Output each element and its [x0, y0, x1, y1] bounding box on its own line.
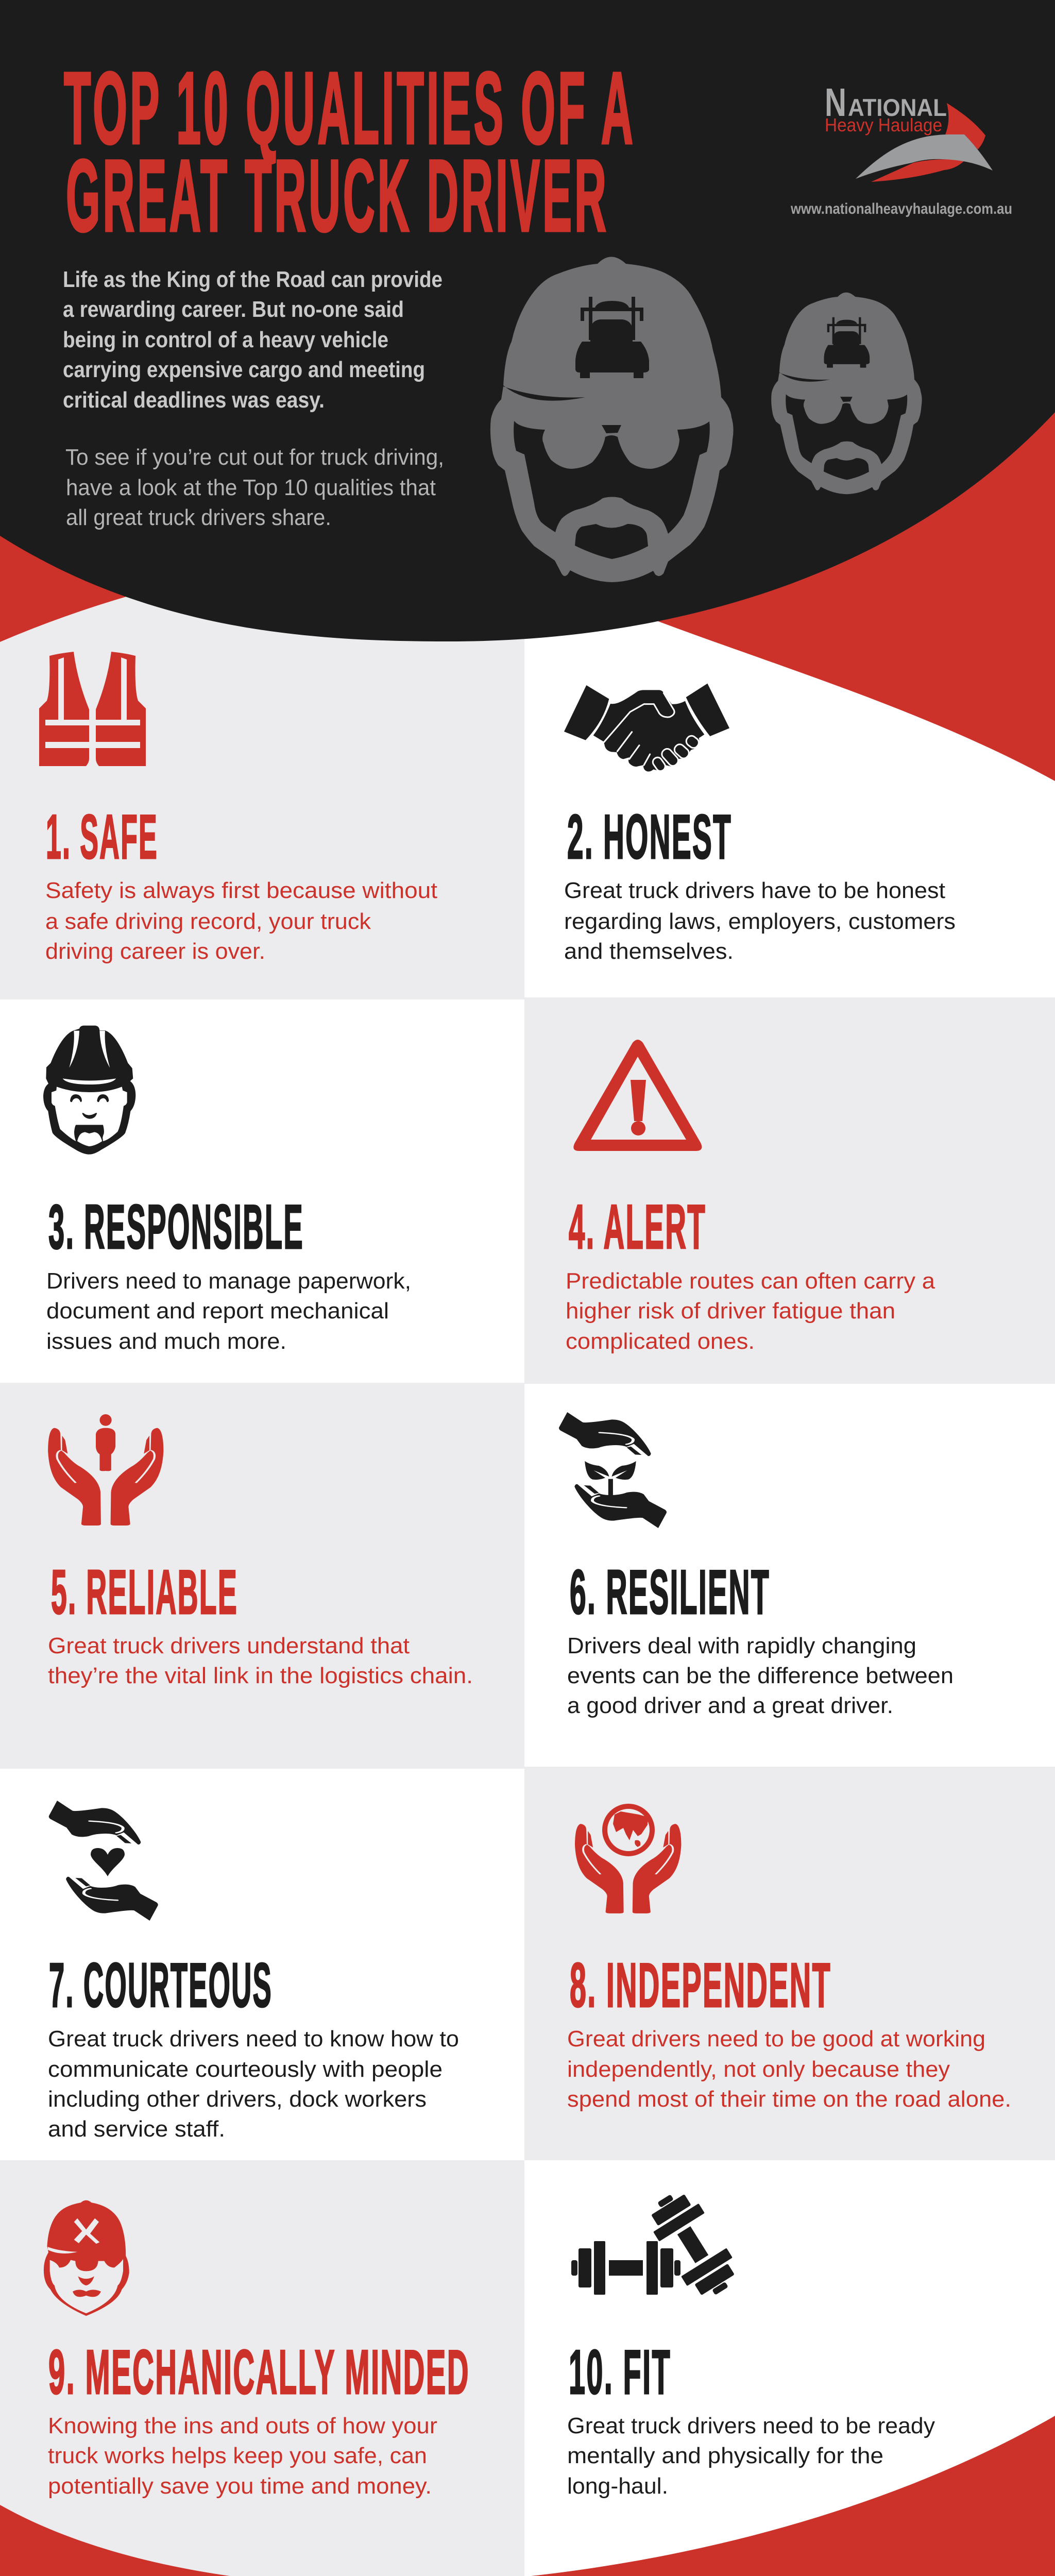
- text: mechanically minded description: potentially save you time and money.: [48, 2473, 432, 2499]
- panel: 8 independent: [524, 1767, 1055, 2160]
- text: safe description: Safety is always first because without: [45, 878, 437, 903]
- icon: warning triangle: [573, 1040, 702, 1151]
- panel: 3 responsible: 3. RESPONSIBLE: [48, 1192, 304, 1262]
- icon: hard hat face: [43, 1026, 135, 1155]
- intro bold text: [63, 267, 443, 413]
- panel: 2 honest: 2. HONEST: [567, 802, 732, 872]
- text: mechanically minded description: [48, 2413, 437, 2499]
- text: honest description: regarding laws, employers, customers: [564, 909, 956, 934]
- text: responsible description: [46, 1268, 411, 1354]
- text: courteous description: Great truck drivers need to know how to: [48, 2026, 459, 2052]
- panel: 5 reliable: [0, 1383, 524, 1769]
- icon: hands with plant: [559, 1412, 667, 1528]
- icon: mechanic face: [44, 2200, 129, 2316]
- intro bold text: critical deadlines was easy.: [63, 387, 325, 413]
- text: courteous description: including other drivers, dock workers: [48, 2087, 427, 2112]
- text: fit description: [567, 2413, 935, 2499]
- text: alert description: [566, 1268, 935, 1354]
- text: responsible description: Drivers need to manage paperwork,: [46, 1268, 411, 1294]
- panel: 6 resilient: [524, 1384, 1055, 1767]
- text: honest description: [564, 878, 956, 964]
- panel: 6 resilient: 6. RESILIENT: [570, 1557, 770, 1627]
- icon: hands holding globe: [575, 1806, 681, 1913]
- intro regular text: have a look at the Top 10 qualities that: [66, 475, 436, 500]
- text: resilient description: a good driver and a great driver.: [567, 1693, 893, 1718]
- icon: handshake: [564, 684, 729, 773]
- bottom red wave: [0, 2416, 1055, 2576]
- intro bold text: Life as the King of the Road can provide: [63, 267, 443, 292]
- intro bold text: carrying expensive cargo and meeting: [63, 357, 425, 382]
- text: alert description: complicated ones.: [566, 1329, 755, 1354]
- text: fit description: mentally and physically for the: [567, 2443, 883, 2468]
- panel: 9 mechanically minded: 9. MECHANICALLY MINDED: [48, 2337, 470, 2407]
- text: safe description: driving career is over.: [45, 939, 265, 964]
- title: [64, 51, 636, 252]
- text: reliable description: [48, 1633, 473, 1688]
- text: mechanically minded description: truck works helps keep you safe, can: [48, 2443, 427, 2468]
- text: alert description: higher risk of driver fatigue than: [566, 1298, 895, 1324]
- text: independent description: Great drivers need to be good at working: [567, 2026, 985, 2052]
- intro bold text: being in control of a heavy vehicle: [63, 327, 388, 352]
- website url: www.nationalheavyhaulage.com.au: [790, 200, 1012, 217]
- text: alert description: Predictable routes can often carry a: [566, 1268, 935, 1294]
- text: responsible description: issues and much more.: [46, 1329, 286, 1354]
- panel: 7 courteous: 7. COURTEOUS: [49, 1950, 273, 2020]
- icon: hands with heart: [49, 1801, 158, 1921]
- panel: 4 alert: [524, 997, 1055, 1384]
- panel: 2 honest: [524, 613, 1055, 997]
- text: courteous description: and service staff.: [48, 2116, 225, 2142]
- text: responsible description: document and report mechanical: [46, 1298, 389, 1324]
- text: independent description: independently, not only because they: [567, 2057, 950, 2082]
- text: fit description: Great truck drivers need to be ready: [567, 2413, 935, 2438]
- panel: 9 mechanically minded: [0, 2160, 524, 2576]
- text: fit description: long-haul.: [567, 2473, 668, 2499]
- icon: dumbbells: [571, 2184, 744, 2305]
- text: honest description: and themselves.: [564, 939, 734, 964]
- text: courteous description: [48, 2026, 459, 2142]
- intro regular text: all great truck drivers share.: [66, 505, 331, 530]
- header red accent left: [0, 531, 144, 642]
- icon: hands holding person: [48, 1414, 163, 1526]
- icon: safety vest: [39, 652, 146, 766]
- text: independent description: [567, 2026, 1011, 2112]
- text: reliable description: Great truck drivers understand that: [48, 1633, 410, 1658]
- panel: 1 safe: [0, 587, 524, 999]
- panel: 3 responsible: [0, 999, 524, 1383]
- text: safe description: a safe driving record, your truck: [45, 909, 371, 934]
- text: resilient description: events can be the difference between: [567, 1663, 954, 1688]
- text: courteous description: communicate courteously with people: [48, 2057, 443, 2082]
- illustration: large driver face: [490, 257, 734, 582]
- panel: 1 safe: 1. SAFE: [46, 802, 158, 872]
- illustration: small driver face: [771, 293, 922, 494]
- text: mechanically minded description: Knowing the ins and outs of how your: [48, 2413, 437, 2438]
- text: reliable description: they’re the vital link in the logistics chain.: [48, 1663, 473, 1688]
- intro bold text: a rewarding career. But no-one said: [63, 297, 404, 322]
- text: safe description: [45, 878, 437, 964]
- intro regular text: To see if you’re cut out for truck driving,: [65, 445, 444, 470]
- header panel: [0, 0, 1055, 641]
- text: resilient description: Drivers deal with rapidly changing: [567, 1633, 916, 1658]
- panel: 4 alert: 4. ALERT: [569, 1192, 706, 1262]
- text: honest description: Great truck drivers have to be honest: [564, 878, 945, 903]
- text: resilient description: [567, 1633, 954, 1718]
- logo: national heavy haulage: [825, 80, 993, 182]
- header red accent right: [653, 361, 1055, 781]
- text: independent description: spend most of their time on the road alone.: [567, 2087, 1011, 2112]
- panel: 7 courteous: [0, 1769, 524, 2160]
- intro regular text: [65, 445, 444, 530]
- panel: 10 fit: [524, 2160, 1055, 2576]
- panel: 5 reliable: 5. RELIABLE: [51, 1557, 238, 1627]
- panel: 10 fit: 10. FIT: [569, 2337, 671, 2407]
